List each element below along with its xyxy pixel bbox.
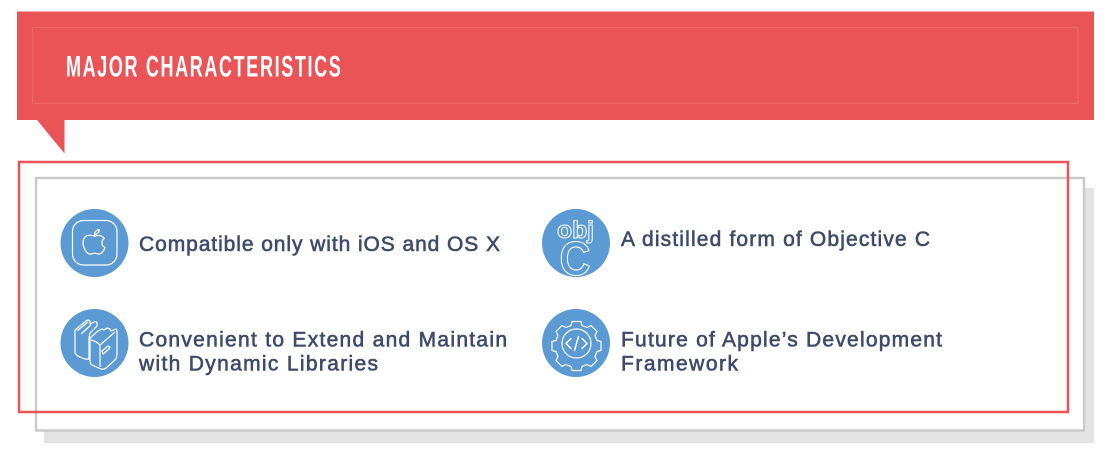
icon: gear with code: [542, 309, 610, 377]
icon: obj C: obj: [557, 217, 594, 244]
label: Convenient to Extend and Maintain: [139, 328, 507, 352]
label: with Dynamic Libraries: [138, 352, 378, 376]
label: Framework: [621, 352, 738, 376]
title: MAJOR CHARACTERISTICS: [66, 51, 341, 84]
label: Future of Apple’s Development: [621, 328, 942, 352]
icon: obj C: [542, 209, 610, 286]
item: dynamic libraries: [60, 309, 507, 377]
label: [138, 328, 507, 376]
item: future framework: [542, 309, 942, 377]
icon: apple: [60, 209, 128, 277]
panel: red outline: [19, 162, 1068, 412]
panel shadow: [44, 188, 1094, 443]
label: A distilled form of Objective C: [621, 228, 930, 251]
item: iOS compatibility: [60, 209, 500, 277]
label: [621, 328, 942, 376]
icon: obj C: C: [560, 233, 590, 286]
panel: gray framed card: [36, 178, 1084, 430]
header banner: [17, 12, 1094, 154]
icon: books: [60, 309, 128, 377]
label: Compatible only with iOS and OS X: [139, 233, 500, 256]
item: Objective C: [542, 209, 930, 286]
